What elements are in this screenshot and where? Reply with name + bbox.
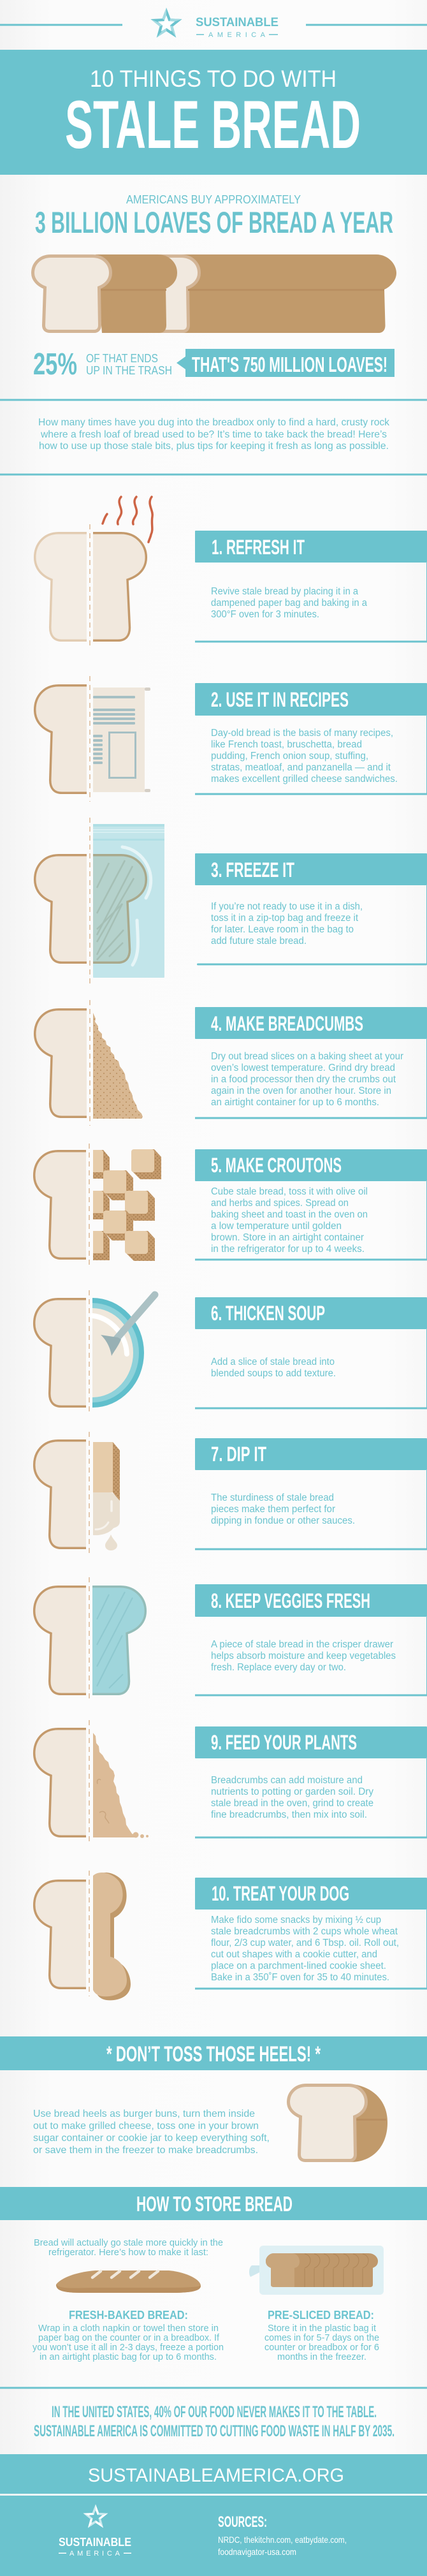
- stat: 25 percent: 25%: [33, 348, 77, 381]
- body text: 300°F oven for 3 minutes.: [211, 609, 319, 620]
- body text: Cube stale bread, toss it with olive oil: [211, 1186, 368, 1197]
- body text: baking sheet and toast in the oven on: [211, 1209, 368, 1220]
- panel: 4 make breadcrumbs: [35, 1000, 427, 1126]
- body text: like French toast, bruschetta, bread: [211, 739, 362, 750]
- text block: bread heels: Use bread heels as burger buns, turn them inside: [33, 2109, 255, 2119]
- panel: 6 thicken soup: [34, 1290, 427, 1415]
- panel: 9 feed your plants: [34, 1720, 427, 1845]
- text block: fresh-baked bread: [33, 2309, 224, 2362]
- heading band: don't toss those heels: * DON’T TOSS THOSE HEELS! *: [106, 2042, 321, 2066]
- body text: oven’s lowest temperature. Grind dry bread: [211, 1063, 395, 1073]
- body text: flour, 2/3 cup water, and 6 Tbsp. oil. Roll out,: [211, 1938, 399, 1948]
- icon: bread half in crisper: [34, 1577, 145, 1702]
- icon: sliced loaf in plastic bag: [249, 2246, 384, 2295]
- body text: Dry out bread slices on a baking sheet at your: [211, 1051, 403, 1062]
- sources: [218, 2513, 347, 2557]
- icon: bread and recipe page: [35, 676, 150, 802]
- text block: fresh-baked bread: paper bag on the counter or in a breadbox. If: [38, 2332, 220, 2343]
- stat heading: AMERICANS BUY APPROXIMATELY: [126, 193, 301, 206]
- title band: [0, 50, 427, 175]
- body text: [211, 1492, 355, 1526]
- icon: bread and croutons: [34, 1144, 161, 1268]
- text block: pre-sliced bread: months in the freezer.: [277, 2352, 366, 2362]
- intro text: [38, 417, 390, 452]
- icon: bread turned to crumbs: [35, 1000, 143, 1126]
- heading: [195, 683, 427, 716]
- text block: fresh-baked bread: FRESH-BAKED BREAD:: [69, 2309, 188, 2322]
- body text: Bake in a 350˚F oven for 35 to 40 minutes.: [211, 1972, 389, 1983]
- text block: bread heels: or save them in the freezer to make breadcrumbs.: [33, 2145, 258, 2156]
- text block: pre-sliced bread: counter or breadbox or for 6: [264, 2342, 379, 2353]
- heading: 6. THICKEN SOUP: [211, 1302, 325, 1325]
- header logo: Sustainable America: [0, 8, 427, 39]
- stat: 25 percent: [33, 348, 172, 381]
- text block: fresh-baked bread: in an airtight plastic bag for up to 6 months.: [40, 2352, 217, 2362]
- body text: Day-old bread is the basis of many recipes,: [211, 728, 393, 739]
- icon: bread and dog bone: [34, 1871, 131, 2000]
- heading: [195, 1007, 427, 1039]
- heading: 2. USE IT IN RECIPES: [211, 688, 349, 711]
- stat: 25 percent: UP IN THE TRASH: [86, 364, 172, 377]
- icon: bread dipped in sauce: [34, 1432, 120, 1556]
- heading: [195, 1438, 427, 1470]
- storage intro text: refrigerator. Here’s how to make it last:: [48, 2247, 208, 2258]
- body text: stale bread in the oven, grind to create: [211, 1798, 373, 1809]
- body text: [211, 1051, 403, 1108]
- body text: add future stale bread.: [211, 936, 307, 946]
- body text: Revive stale bread by placing it in a: [211, 586, 358, 597]
- heading: 1. REFRESH IT: [212, 536, 305, 559]
- body text: toss it in a zip-top bag and freeze it: [211, 913, 359, 924]
- callout: 750 million loaves: [177, 349, 394, 377]
- sources: foodnavigator-usa.com: [218, 2547, 296, 2557]
- body text: again in the oven for another hour. Store in: [211, 1086, 391, 1096]
- body text: helps absorb moisture and keep vegetables: [211, 1651, 396, 1661]
- heading band: how to store bread: [0, 2187, 427, 2220]
- body text: Breadcrumbs can add moisture and: [211, 1775, 363, 1786]
- title line 1: 10 THINGS TO DO WITH: [90, 66, 337, 92]
- body text: in a food processor then dry the crumbs out: [211, 1074, 396, 1085]
- body text: [211, 1775, 373, 1820]
- panel: 2 use it in recipes: [35, 676, 427, 802]
- body text: dipping in fondue or other sauces.: [211, 1515, 355, 1526]
- panel: 5 make croutons: [34, 1144, 427, 1268]
- intro text: How many times have you dug into the breadbox only to find a hard, crusty rock: [38, 417, 390, 428]
- body text: Add a slice of stale bread into: [211, 1357, 335, 1367]
- body text: makes excellent grilled cheese sandwiches.: [211, 774, 398, 784]
- icon: bread and soil: [34, 1720, 148, 1845]
- heading: [195, 853, 427, 885]
- stat heading: [35, 193, 393, 239]
- footer logo: SUSTAINABLE: [59, 2536, 131, 2549]
- body text: The sturdiness of stale bread: [211, 1492, 334, 1503]
- body text: pieces make them perfect for: [211, 1504, 335, 1515]
- text block: pre-sliced bread: Store it in the plastic bag it: [268, 2323, 377, 2334]
- illustration: loaf of bread: [33, 254, 396, 333]
- website band: [0, 2454, 427, 2494]
- icon: white star: [83, 2504, 108, 2528]
- icon: star logo: [150, 8, 182, 38]
- header logo: Sustainable America: SUSTAINABLE: [196, 16, 279, 29]
- storage intro text: Bread will actually go stale more quickly in the: [34, 2237, 223, 2248]
- icon: bread and soup bowl: [34, 1290, 155, 1415]
- body text: and herbs and spices. Spread on: [211, 1198, 349, 1209]
- icon: bread in zip-top bag: [35, 818, 164, 984]
- heading: [195, 531, 427, 563]
- body text: place on a parchment-lined cookie sheet.: [211, 1961, 386, 1971]
- body text: dampened paper bag and baking in a: [211, 598, 367, 608]
- storage intro text: [34, 2237, 223, 2258]
- body text: nutrients to potting or garden soil. Dry: [211, 1786, 373, 1797]
- sources: NRDC, thekitchn.com, eatbydate.com,: [218, 2535, 347, 2545]
- body text: [211, 728, 398, 784]
- sources: SOURCES:: [218, 2513, 267, 2531]
- text block: bread heels: [33, 2109, 270, 2156]
- website band: SUSTAINABLEAMERICA.ORG: [88, 2465, 344, 2486]
- text block: pre-sliced bread: [264, 2309, 379, 2362]
- body text: If you’re not ready to use it in a dish,: [211, 901, 363, 912]
- body text: a low temperature until golden: [211, 1221, 342, 1232]
- footer logo: [59, 2504, 131, 2558]
- body text: Make fido some snacks by mixing ½ cup: [211, 1915, 381, 1925]
- sauce drop: [105, 1535, 117, 1550]
- body text: stratas, meatloaf, and panzanella — and it: [211, 762, 391, 773]
- panel: 3 freeze it: [35, 818, 427, 984]
- text block: fresh-baked bread: Wrap in a cloth napkin or towel then store in: [38, 2323, 219, 2334]
- body text: pudding, French onion soup, stuffing,: [211, 751, 368, 762]
- body text: blended soups to add texture.: [211, 1368, 336, 1379]
- body text: an airtight container for up to 6 months.: [211, 1097, 379, 1108]
- body text: for later. Leave room in the bag to: [211, 924, 354, 935]
- closing statement: [34, 2403, 394, 2440]
- body text: [211, 1915, 399, 1983]
- body text: cut out shapes with a cookie cutter, and: [211, 1949, 377, 1960]
- footer logo: AMERICA: [69, 2550, 120, 2558]
- text block: bread heels: out to make grilled cheese, toss one in your brown: [33, 2121, 259, 2131]
- heading: [195, 1726, 427, 1758]
- heading: [195, 1878, 427, 1910]
- heading: 3. FREEZE IT: [211, 858, 294, 881]
- body text: brown. Store in an airtight container: [211, 1232, 364, 1243]
- body text: [211, 586, 367, 620]
- intro text: how to use up those stale bits, plus tips for keeping it fresh as long as possible.: [39, 441, 389, 452]
- footer panel: [0, 2496, 427, 2576]
- panel: 1 refresh it: [35, 497, 427, 649]
- heading band: don't toss those heels: [0, 2036, 427, 2070]
- body text: in the refrigerator for up to 4 weeks.: [211, 1244, 365, 1255]
- panel: 8 keep veggies fresh: [34, 1577, 427, 1702]
- illustration: bread heel: [288, 2084, 387, 2162]
- panel: 7 dip it: [34, 1432, 427, 1556]
- body text: [211, 1357, 336, 1379]
- text block: fresh-baked bread: you won’t use it all in 2-3 days, freeze a portion: [33, 2342, 224, 2353]
- body text: fine breadcrumbs, then mix into soil.: [211, 1809, 367, 1820]
- cut croutons at the centre line: [93, 1150, 110, 1260]
- heading: 5. MAKE CROUTONS: [211, 1154, 342, 1177]
- body text: [211, 1639, 396, 1673]
- heading band: how to store bread: HOW TO STORE BREAD: [136, 2192, 293, 2216]
- stat: 25 percent: OF THAT ENDS: [86, 352, 158, 365]
- intro text: where a fresh loaf of bread used to be? It’s time to take back the bread! Here’s: [40, 429, 387, 440]
- text block: pre-sliced bread: comes in for 5-7 days on the: [264, 2332, 379, 2343]
- header logo: Sustainable America: AMERICA: [208, 31, 266, 39]
- heading: [195, 1149, 427, 1181]
- heading: [195, 1297, 427, 1329]
- body text: stale breadcrumbs with 2 cups whole wheat: [211, 1926, 398, 1937]
- body text: [211, 901, 363, 946]
- spoon: [101, 1295, 155, 1356]
- panel: 10 treat your dog: [34, 1871, 427, 2000]
- body text: [211, 1186, 368, 1255]
- body text: fresh. Replace every day or two.: [211, 1662, 346, 1673]
- icon: baguette: [56, 2271, 201, 2293]
- heading: 7. DIP IT: [211, 1443, 266, 1466]
- body text: A piece of stale bread in the crisper drawer: [211, 1639, 393, 1650]
- text block: bread heels: sugar container or cookie jar to keep everything soft,: [33, 2133, 270, 2144]
- text block: pre-sliced bread: PRE-SLICED BREAD:: [268, 2309, 374, 2322]
- heading: [195, 1584, 427, 1617]
- heading: 10. TREAT YOUR DOG: [212, 1882, 349, 1905]
- icon: refreshed bread with steam: [35, 497, 152, 649]
